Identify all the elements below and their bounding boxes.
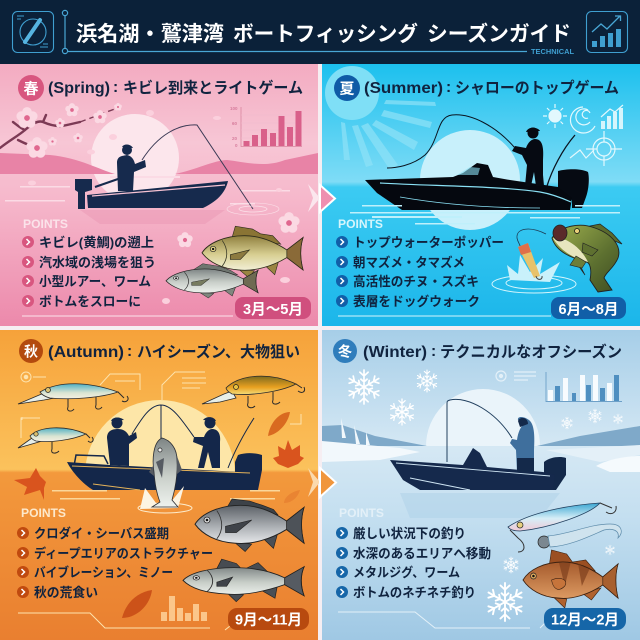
title: ボートフィッシング: [233, 22, 418, 46]
date badge: spring: 3月～5月: [243, 301, 303, 318]
points list: 汽水域の浅場を狙う: [39, 255, 156, 270]
season badge: spring: [18, 75, 44, 101]
season badge: summer: 夏: [339, 80, 355, 98]
icon: rising chart emblem: [586, 12, 628, 52]
fish: rockfish: [523, 550, 618, 608]
panel title: winter: テクニカルなオフシーズン: [440, 342, 622, 361]
date badge: spring: [235, 297, 311, 319]
bar chart: 0: [235, 143, 238, 148]
title: [76, 22, 571, 46]
water highlights: [5, 176, 290, 204]
boat and angler: [365, 115, 589, 210]
points list: 朝マズメ・タマズメ: [353, 255, 465, 270]
lure: top right crankbait: [202, 376, 305, 408]
panel title: autumn: [48, 342, 300, 361]
decorative footer line: [22, 315, 233, 317]
icon: fishing reel emblem: [12, 12, 54, 52]
points heading: POINTS: [23, 217, 68, 231]
points list: [17, 526, 213, 600]
panel title: winter: [363, 342, 622, 361]
cherry blossom branch: [0, 103, 122, 158]
distant hills: [0, 153, 318, 174]
points list: [336, 526, 491, 600]
points list: [22, 235, 156, 309]
points heading: POINTS: [339, 506, 384, 520]
season badge: summer: [334, 75, 360, 101]
tech line decorations: [18, 372, 301, 630]
decorative footer line: [338, 315, 551, 317]
boat and anglers: [67, 405, 262, 490]
points list: バイブレーション、ミノー: [34, 565, 173, 580]
water highlights: [350, 205, 620, 224]
fish: seabass: [183, 559, 304, 602]
title: 浜名湖・鷲津湾: [76, 23, 224, 46]
lure: left minnow: [18, 428, 93, 453]
points list: 表層をドッグウォーク: [353, 294, 480, 309]
sun glow: [85, 400, 235, 475]
panel title: spring: (Spring): [48, 80, 110, 97]
panel title: winter: :: [431, 343, 436, 360]
points list: トップウォーターポッパー: [353, 235, 504, 250]
panel: spring: [0, 64, 318, 326]
splash and popper lure: [492, 229, 576, 293]
fish: yellowfin seabream: [202, 226, 303, 278]
bar chart: 100: [230, 106, 238, 111]
fish: black seabream: [195, 499, 304, 552]
points list: 水深のあるエリアへ移動: [353, 546, 491, 561]
points list: ボトムをスローに: [39, 294, 141, 309]
blossoms near fish: [177, 212, 300, 247]
date badge: autumn: [228, 608, 309, 630]
panel title: autumn: :: [127, 343, 132, 360]
fish: largemouth bass: [552, 224, 622, 292]
boat and angler: [75, 125, 279, 224]
header bar: [0, 0, 640, 64]
snowflakes: [347, 370, 623, 621]
panel: winter: [322, 330, 640, 640]
date badge: summer: 6月～8月: [558, 301, 618, 318]
points heading: POINTS: [21, 506, 66, 520]
connector line: [62, 10, 527, 54]
season badge: spring: 春: [23, 80, 39, 98]
points list: ボトムのネチネチ釣り: [353, 585, 476, 600]
tech readout: [496, 371, 536, 381]
bar chart: [161, 596, 207, 621]
fish: silver bream: [166, 264, 258, 298]
date badge: winter: [544, 608, 626, 630]
panel title: autumn: (Autumn): [48, 344, 124, 361]
boat reflection: [80, 210, 225, 224]
date badge: winter: 12月～2月: [551, 612, 619, 628]
falling petals: [28, 110, 290, 304]
bar chart: [546, 372, 622, 402]
distant hills and snow banks: [322, 418, 640, 472]
panel title: winter: (Winter): [363, 344, 427, 361]
lure: top left minnow: [18, 384, 128, 411]
arrow: autumn to winter: [308, 468, 336, 497]
points list: キビレ(黄鯛)の遡上: [39, 235, 154, 250]
technical tag: TECHNICAL: [531, 47, 574, 56]
bar chart: 20: [232, 136, 238, 141]
sun glow: [91, 114, 179, 202]
season badge: autumn: [19, 339, 43, 363]
points list: 高活性のチヌ・スズキ: [353, 274, 479, 289]
points list: 秋の荒食い: [34, 585, 98, 600]
sun and rays: [325, 66, 520, 230]
panel: autumn: [0, 330, 318, 640]
points list: 小型ルアー、ワーム: [39, 274, 151, 289]
points heading: POINTS: [338, 217, 383, 231]
boat and angler: [390, 399, 566, 518]
metal jig lure: [508, 503, 616, 552]
panel title: summer: :: [446, 79, 451, 96]
bar chart: 60: [232, 121, 238, 126]
season badge: winter: 冬: [338, 344, 352, 360]
points list: [336, 235, 504, 309]
date badge: autumn: 9月～11月: [235, 612, 302, 628]
season badge: winter: [333, 339, 357, 363]
small technical icons: [543, 104, 623, 166]
soft worm jig: [538, 524, 621, 548]
title: シーズンガイド: [427, 22, 571, 46]
bar chart: [230, 106, 302, 148]
pale sun: [426, 389, 540, 446]
panel title: autumn: ハイシーズン、大物狙い: [137, 342, 300, 361]
decorative footer lines: [338, 612, 548, 628]
panel title: summer: シャローのトップゲーム: [455, 78, 619, 97]
panel title: summer: [364, 78, 619, 97]
points list: メタルジグ、ワーム: [353, 565, 460, 580]
panel title: spring: :: [113, 79, 118, 96]
panel title: summer: (Summer): [364, 80, 443, 97]
season badge: autumn: 秋: [24, 344, 38, 360]
points list: ディープエリアのストラクチャー: [34, 546, 213, 561]
points list: 厳しい状況下の釣り: [353, 526, 466, 541]
fish hooked above water: [138, 438, 192, 513]
panel title: spring: [48, 78, 303, 97]
autumn leaves: [14, 412, 304, 618]
panel: summer: [322, 64, 640, 326]
water highlights: [52, 490, 280, 500]
date badge: summer: [551, 297, 626, 319]
arrow: spring to summer: [308, 184, 335, 212]
panel title: spring: キビレ到来とライトゲーム: [123, 78, 303, 97]
points list: クロダイ・シーバス盛期: [34, 526, 169, 541]
